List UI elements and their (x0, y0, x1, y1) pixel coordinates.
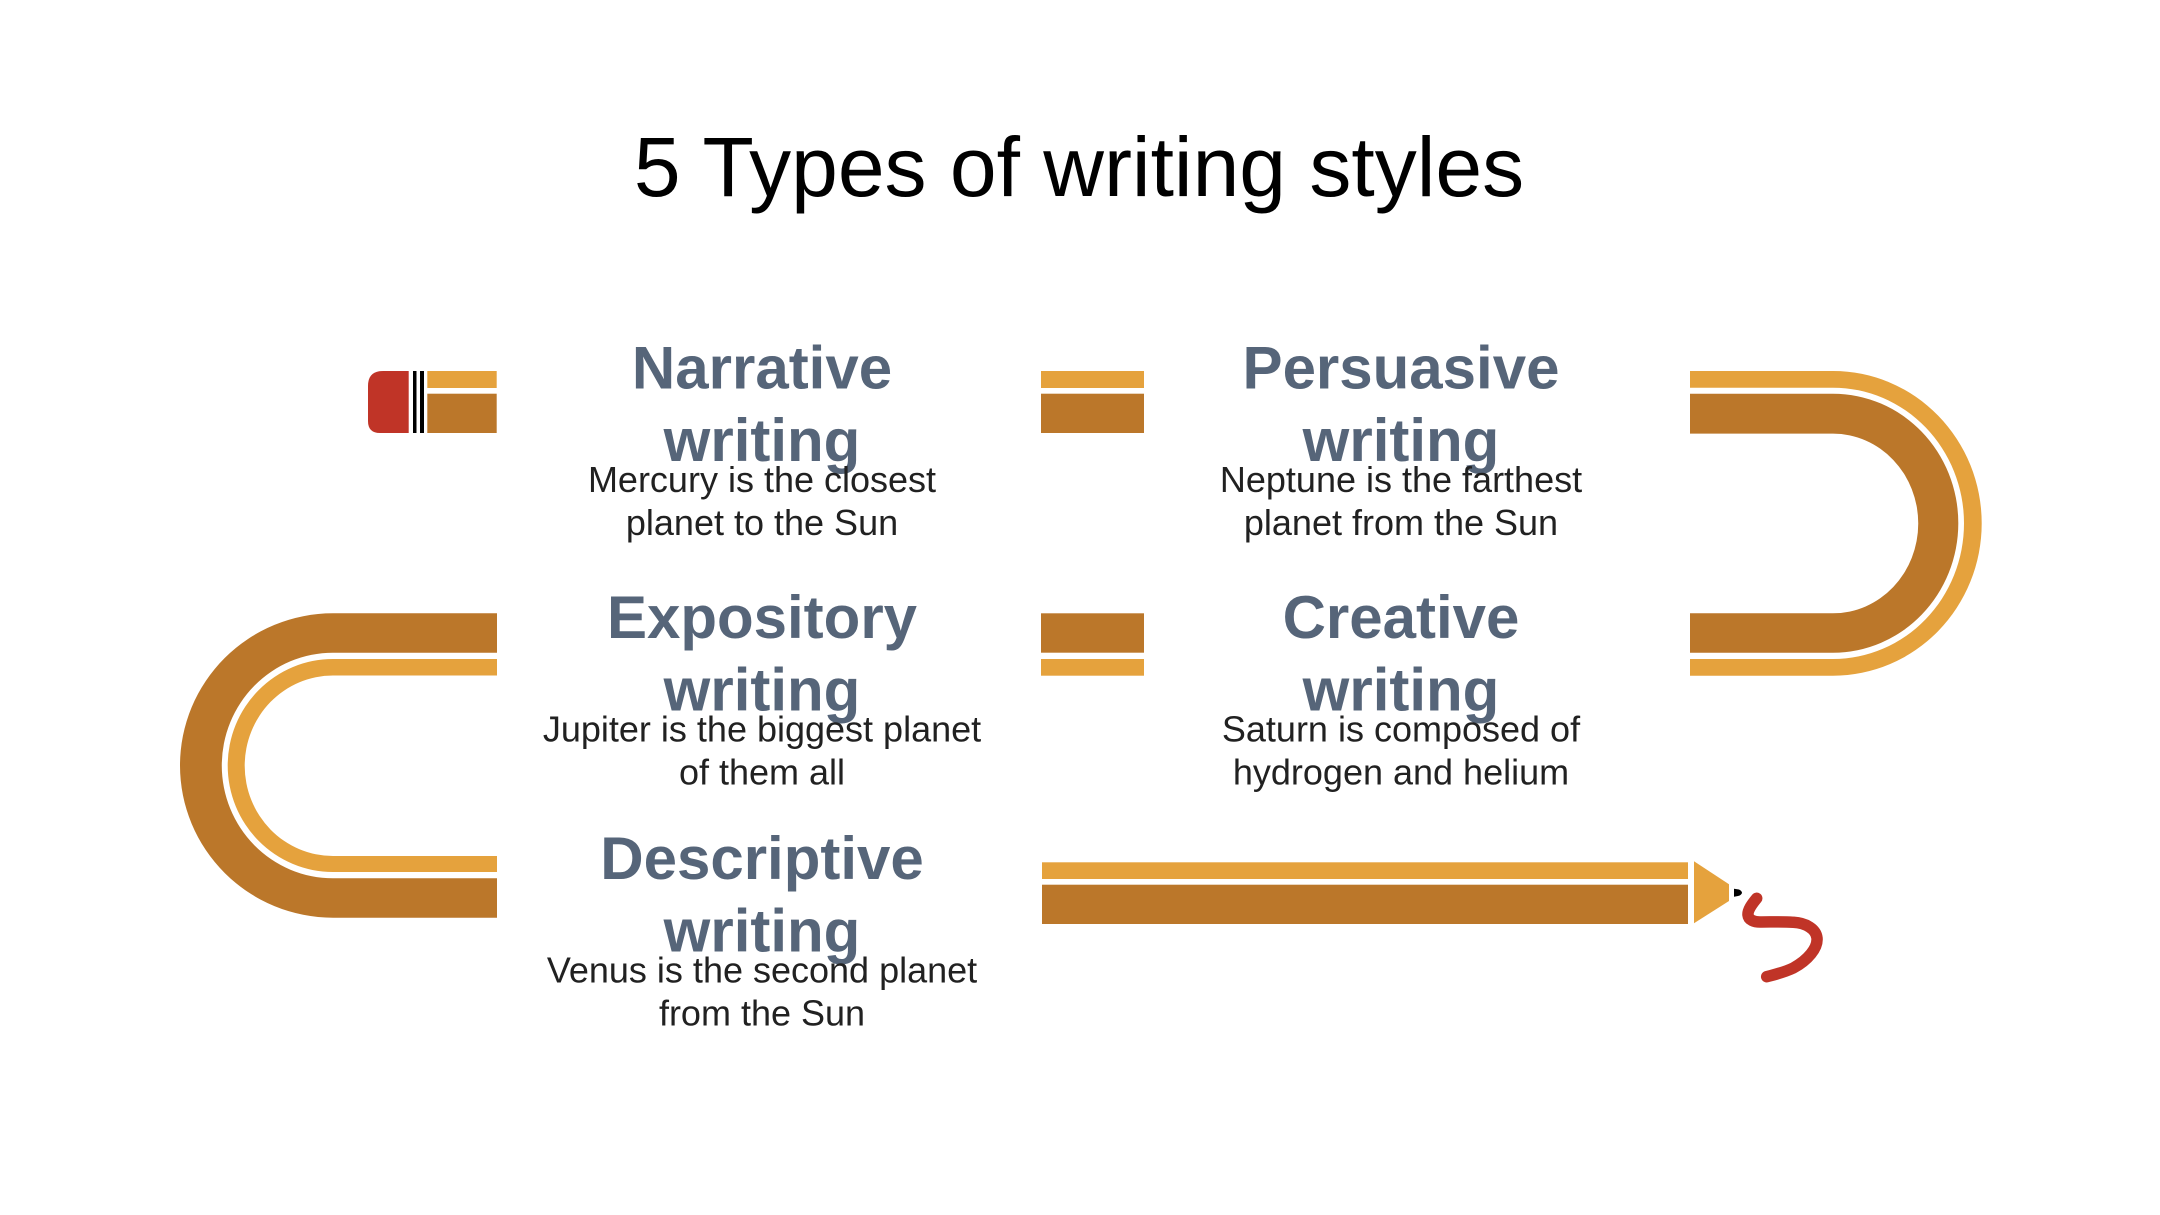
heading: Descriptive writing (600, 825, 924, 964)
text: Persuasive description: planet from the Sun (1244, 502, 1558, 543)
text: Persuasive description (1220, 459, 1582, 543)
text: Creative description: Saturn is composed of (1222, 708, 1581, 750)
heading: Creative writing: Creative (1283, 584, 1519, 651)
icon: pencil tip (1694, 861, 1742, 923)
text: Descriptive description (547, 950, 977, 1034)
pencil segment top middle (1041, 371, 1144, 433)
pencil curve right (1690, 371, 1982, 676)
text: Descriptive description: Venus is the second planet (547, 950, 977, 990)
heading: Narrative writing: Narrative (632, 334, 892, 402)
heading: Descriptive writing: Descriptive (600, 825, 924, 892)
heading: Narrative writing: writing (663, 407, 860, 474)
text: Creative description: hydrogen and helium (1233, 752, 1569, 792)
heading: Expository writing: writing (663, 656, 860, 724)
heading: Narrative writing (632, 334, 892, 474)
text: Creative description (1222, 708, 1581, 792)
text: Expository description: of them all (679, 752, 845, 792)
heading: Descriptive writing: writing (663, 898, 860, 964)
text: Narrative description: planet to the Sun (626, 502, 898, 543)
pencil illustration (180, 371, 1982, 977)
text: Expository description: Jupiter is the biggest planet (543, 708, 981, 750)
text: Narrative description: Mercury is the closest (588, 459, 936, 500)
text: Persuasive description: Neptune is the farthest (1220, 459, 1582, 500)
text: Descriptive description: from the Sun (659, 992, 865, 1034)
pencil segment middle (1041, 613, 1144, 676)
heading: Expository writing: Expository (607, 584, 918, 651)
pencil curve left (180, 613, 497, 918)
heading: Persuasive writing: writing (1302, 407, 1499, 474)
heading: Creative writing: writing (1302, 656, 1499, 724)
icon: red scribble (1748, 898, 1817, 977)
heading: Persuasive writing (1243, 334, 1559, 474)
heading: Expository writing (607, 584, 918, 724)
pencil shaft bottom (1042, 862, 1688, 924)
heading: Creative writing (1283, 584, 1519, 724)
text: Expository description (543, 708, 981, 792)
text: Narrative description (588, 459, 936, 543)
icon: pencil eraser end (368, 371, 497, 433)
title: 5 Types of writing styles (634, 120, 1524, 214)
heading: Persuasive writing: Persuasive (1243, 334, 1559, 402)
